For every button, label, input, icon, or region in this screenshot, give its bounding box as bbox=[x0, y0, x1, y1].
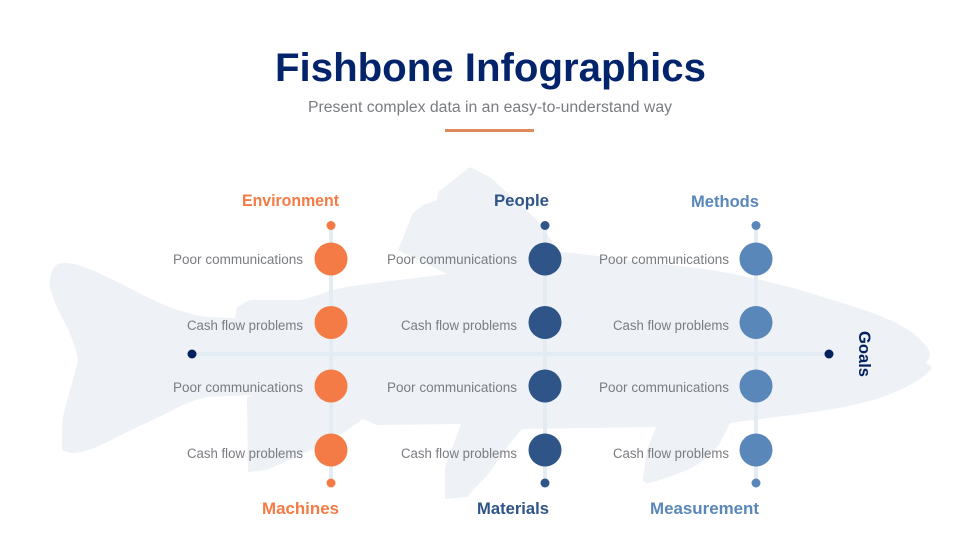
end dots bbox=[752, 221, 760, 488]
heading: environment: Environment bbox=[242, 192, 339, 210]
heading: materials: Materials bbox=[477, 500, 549, 518]
item labels bbox=[387, 252, 517, 461]
item labels: Cash flow problems bbox=[613, 318, 729, 333]
spine tail dot bbox=[188, 350, 196, 358]
goals label: Goals bbox=[855, 331, 873, 377]
item labels: Poor communications bbox=[599, 252, 729, 267]
fish spine axis bbox=[188, 350, 834, 358]
bone: people and materials bbox=[387, 192, 562, 518]
heading: measurement: Measurement bbox=[650, 500, 760, 518]
end dots bbox=[326, 221, 336, 488]
title accent rule bbox=[445, 129, 534, 132]
item labels: Poor communications bbox=[173, 252, 303, 267]
spine head dot bbox=[824, 350, 834, 358]
heading: people: People bbox=[494, 192, 549, 210]
bone: methods and measurement bbox=[599, 193, 772, 518]
node circles bbox=[528, 242, 562, 466]
item labels: Cash flow problems bbox=[401, 446, 517, 461]
item labels: Cash flow problems bbox=[401, 318, 517, 333]
end dots bbox=[540, 221, 550, 488]
item labels bbox=[599, 252, 729, 461]
fish silhouette background bbox=[50, 167, 932, 499]
item labels bbox=[173, 252, 303, 461]
item labels: Cash flow problems bbox=[613, 446, 729, 461]
heading: methods: Methods bbox=[691, 193, 759, 211]
title: Fishbone Infographics bbox=[275, 46, 706, 90]
subtitle: Present complex data in an easy-to-understand way bbox=[308, 99, 672, 116]
node circles bbox=[314, 242, 348, 466]
item labels: Cash flow problems bbox=[187, 446, 303, 461]
item labels: Poor communications bbox=[173, 380, 303, 395]
item labels: Poor communications bbox=[387, 380, 517, 395]
item labels: Poor communications bbox=[599, 380, 729, 395]
item labels: Poor communications bbox=[387, 252, 517, 267]
node circles bbox=[740, 242, 772, 466]
bone: environment and machines bbox=[173, 192, 348, 518]
heading: machines: Machines bbox=[262, 500, 339, 518]
item labels: Cash flow problems bbox=[187, 318, 303, 333]
